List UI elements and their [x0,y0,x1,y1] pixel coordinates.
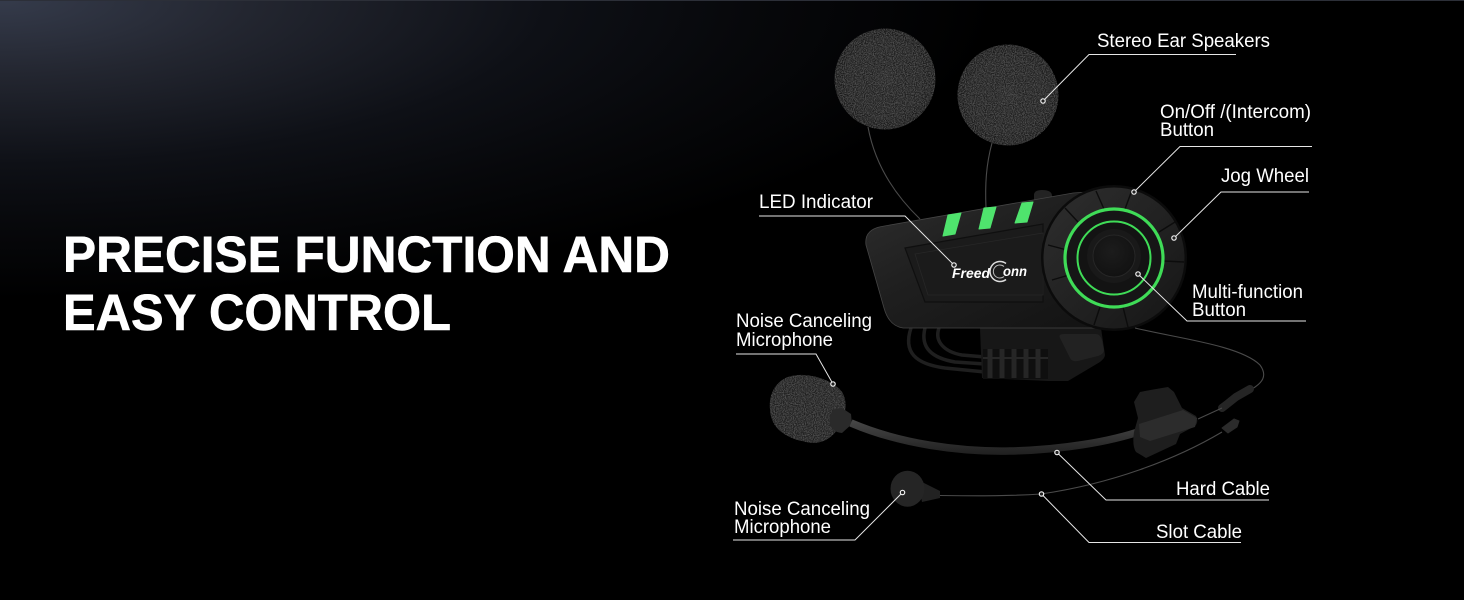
callout: Hard Cable: Hard Cable [1176,479,1270,500]
callout: LED Indicator [759,192,956,267]
icon: intercom clamp and cables [909,328,1105,381]
green LED strips [943,213,961,236]
device body [866,190,1115,328]
callout: Jog Wheel [1172,166,1309,240]
icon: slot cable with flat microphone [890,419,1239,507]
icon: boom microphone [770,375,1197,458]
logo: Freed [952,265,990,281]
callout: Stereo Ear Speakers: Stereo Ear Speakers [1097,31,1270,52]
callout: Noise Canceling Microphone (boom): Noise Canceling [736,311,872,332]
title: EASY CONTROL [63,284,451,341]
callout: Slot Cable: Slot Cable [1156,522,1242,543]
callout: Multi-function Button [1136,272,1306,321]
callout: Jog Wheel: Jog Wheel [1221,166,1309,187]
callout: Noise Canceling Microphone (boom): Microphone [736,330,833,351]
top nub [1034,190,1052,200]
icon: left ear speaker with wire [834,28,936,219]
callout: On/Off (Intercom) Button [1132,102,1312,194]
jog wheel [1041,185,1187,331]
icon: intercom device [866,185,1187,331]
callout: Multi-function Button: Button [1192,300,1246,321]
callout: Hard Cable [1055,450,1270,500]
callout: Slot Cable [1039,492,1242,543]
callout: On/Off (Intercom) Button: On/Off /(Intercom) [1160,102,1311,123]
logo [952,262,1027,282]
logo: onn [1003,263,1027,279]
callout: Noise Canceling Microphone (flat) [733,490,905,540]
callout: Noise Canceling Microphone (flat): Microphone [734,517,831,538]
icon: upper cable to connector [1135,328,1264,419]
callout: Stereo Ear Speakers [1041,31,1270,103]
title [63,226,670,341]
title: PRECISE FUNCTION AND [63,226,670,283]
callout: On/Off (Intercom) Button: Button [1160,120,1214,141]
inset panel [905,224,1043,302]
callout: Noise Canceling Microphone (boom) [736,311,872,386]
callout: Noise Canceling Microphone (flat): Noise Canceling [734,499,870,520]
callout: Multi-function Button: Multi-function [1192,282,1303,303]
icon: right ear speaker with wire [958,44,1058,208]
callout: LED Indicator: LED Indicator [759,192,874,213]
